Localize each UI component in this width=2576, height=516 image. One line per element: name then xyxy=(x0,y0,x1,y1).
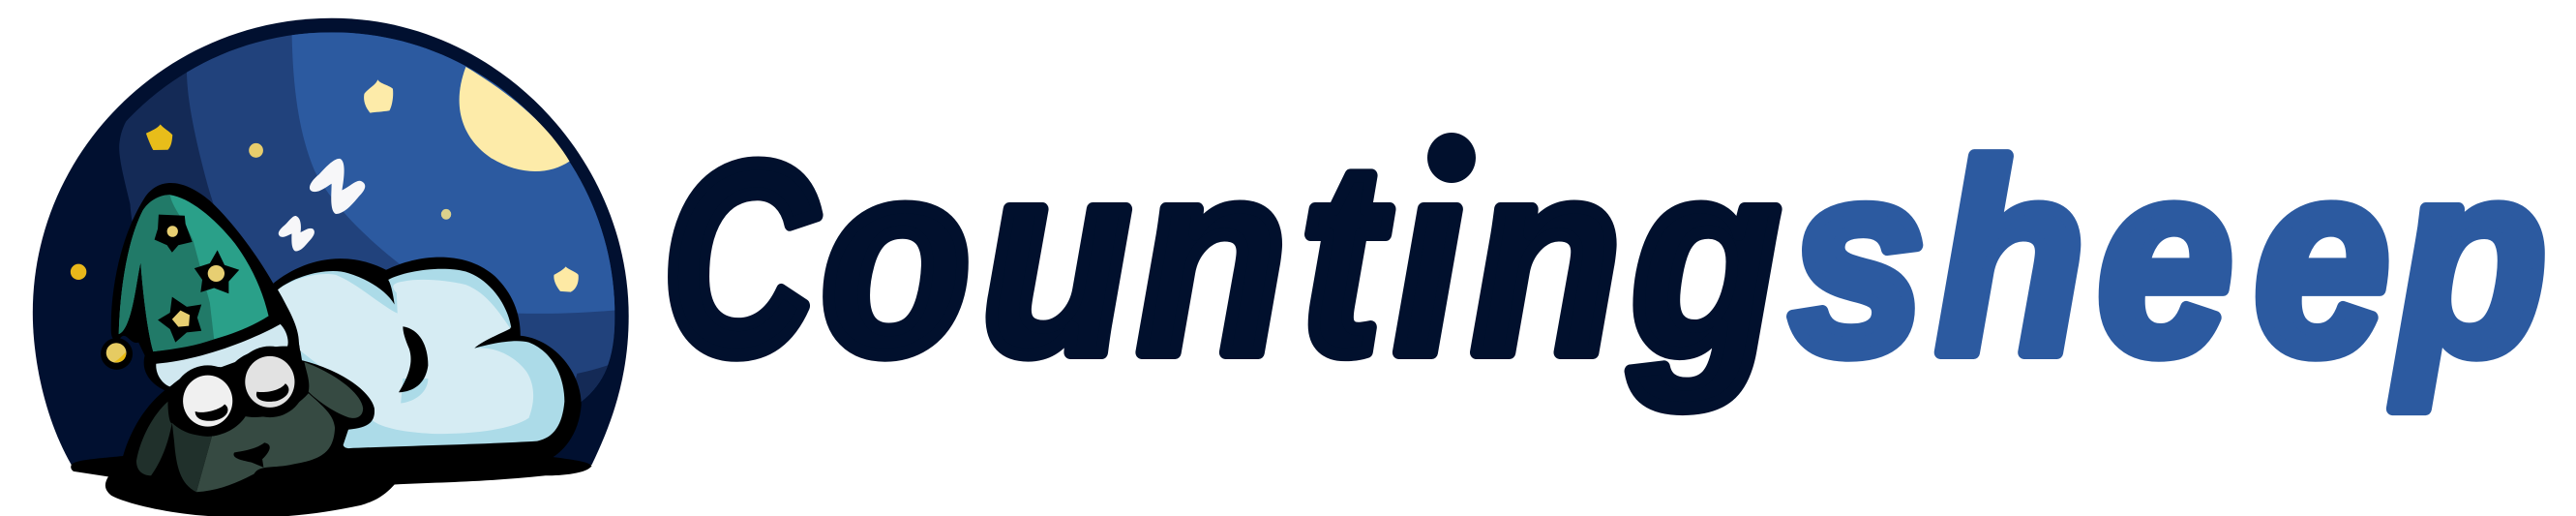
cap pompom xyxy=(106,343,127,363)
pillow xyxy=(273,258,582,468)
sheep face xyxy=(196,393,335,492)
cap fabric xyxy=(119,195,269,351)
wordmark: sheep: sheep xyxy=(1790,108,2547,411)
bottom ground shadow xyxy=(71,456,592,516)
wordmark: Counting, first letter: C xyxy=(663,108,819,410)
wordmark: Counting, remaining letters: ounting xyxy=(822,108,1781,411)
moon xyxy=(460,67,570,171)
cap brim xyxy=(156,324,288,387)
nightcap xyxy=(101,183,299,392)
sheep eyes xyxy=(172,347,306,437)
stars xyxy=(71,79,579,292)
sheep right ear xyxy=(304,362,363,418)
cap stars xyxy=(155,215,239,343)
pillow crease xyxy=(401,379,428,403)
i dot mask xyxy=(1411,121,1493,195)
i dot xyxy=(1427,133,1476,183)
sheep left ear xyxy=(136,402,172,475)
night sky dome xyxy=(33,17,629,465)
z letters xyxy=(279,159,365,251)
icon: sleeping sheep emblem xyxy=(33,17,629,516)
sheep mouth xyxy=(233,442,270,468)
sheep head xyxy=(122,349,374,494)
